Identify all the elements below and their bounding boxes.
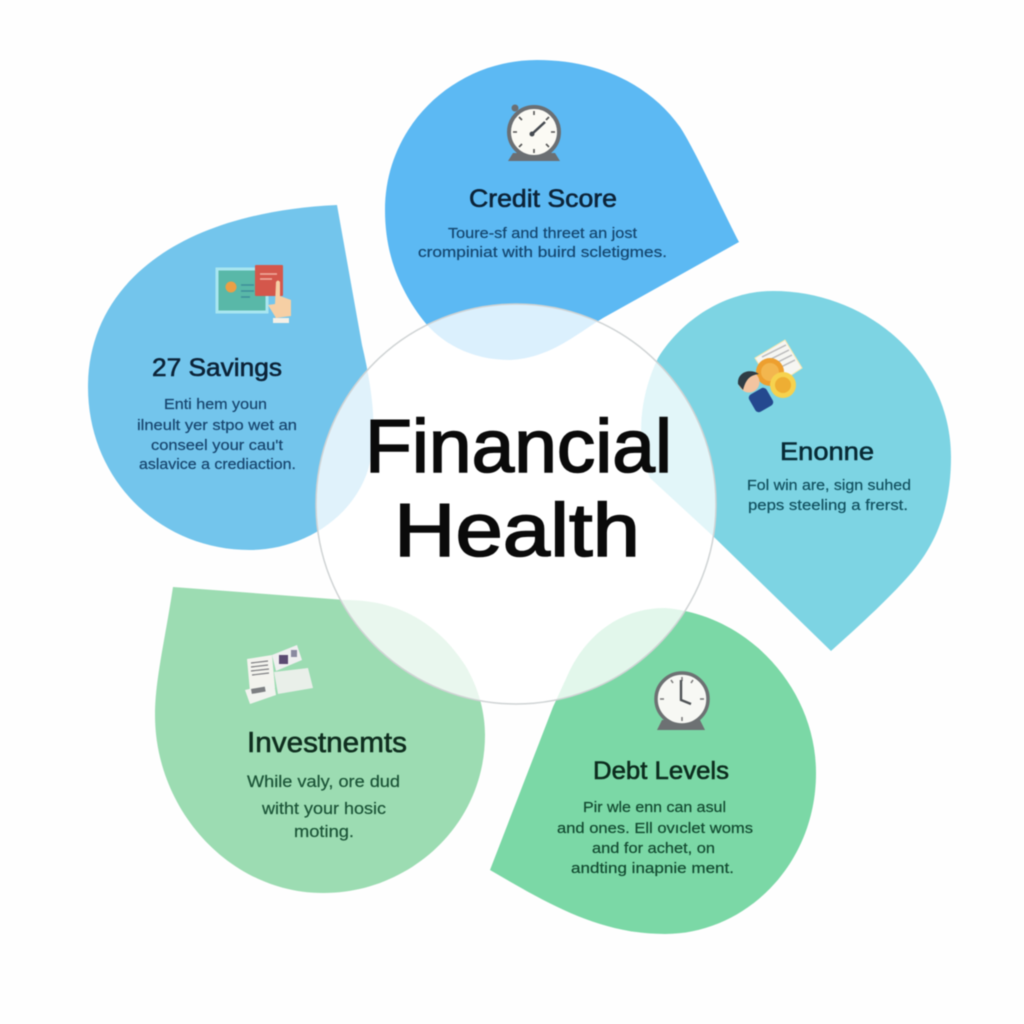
text: Investments: While valy, ore dud [247, 773, 400, 791]
text: Savings [137, 354, 297, 473]
icon: documents and envelopes [245, 645, 313, 704]
text: Credit Score: crompiniat with buird scletigmes. [418, 245, 667, 261]
icon: payment card with hand [217, 265, 291, 323]
text: Credit Score [418, 185, 667, 261]
icon: person with coins and document [738, 340, 802, 414]
text: Savings: conseel your cau't [151, 438, 283, 454]
text: Enonne: peps steeling a frerst. [748, 498, 908, 514]
text: Debt Levels: and ones. Ell ovıclet woms [557, 821, 753, 837]
text: Savings: aslavice a crediaction. [139, 457, 296, 473]
icon: stopwatch gauge [508, 104, 560, 161]
text: Debt Levels: andting inapnie ment. [571, 861, 734, 877]
text: Credit Score: Credit Score [469, 185, 617, 213]
text: Savings: ilneult yer stpo wet an [137, 418, 297, 434]
text: Investments [247, 727, 407, 841]
text: Investments: Investnemts [247, 727, 407, 759]
panel shape: Credit Score [385, 60, 739, 360]
panel shape: Investments [155, 587, 485, 893]
title: Financial Health: Health [394, 488, 640, 572]
central circle [316, 304, 716, 704]
panel shape: Savings [88, 205, 374, 550]
text: Enonne: Fol win are, sign suhed [747, 478, 911, 494]
text: Investments: witht your hosic [261, 800, 386, 818]
panel shape: Debt Levels [490, 608, 816, 934]
text: Credit Score: Toure-sf and threet an jost [448, 226, 637, 242]
text: Savings: Enti hem youn [164, 397, 267, 413]
text: Debt Levels: Pir wle enn can asul [583, 800, 726, 816]
title: Financial Health [365, 404, 672, 572]
text: Debt Levels: Debt Levels [593, 757, 729, 785]
panel shape: Enonne [641, 291, 951, 651]
text: Enonne [747, 438, 911, 514]
text: Debt Levels [557, 757, 753, 877]
text: Debt Levels: and for achet, on [592, 841, 715, 857]
text: Savings: 27 Savings [152, 354, 282, 382]
text: Enonne: Enonne [780, 438, 874, 466]
title: Financial Health: Financial [365, 404, 672, 488]
icon: clock [656, 673, 708, 730]
text: Investments: moting. [294, 823, 354, 841]
